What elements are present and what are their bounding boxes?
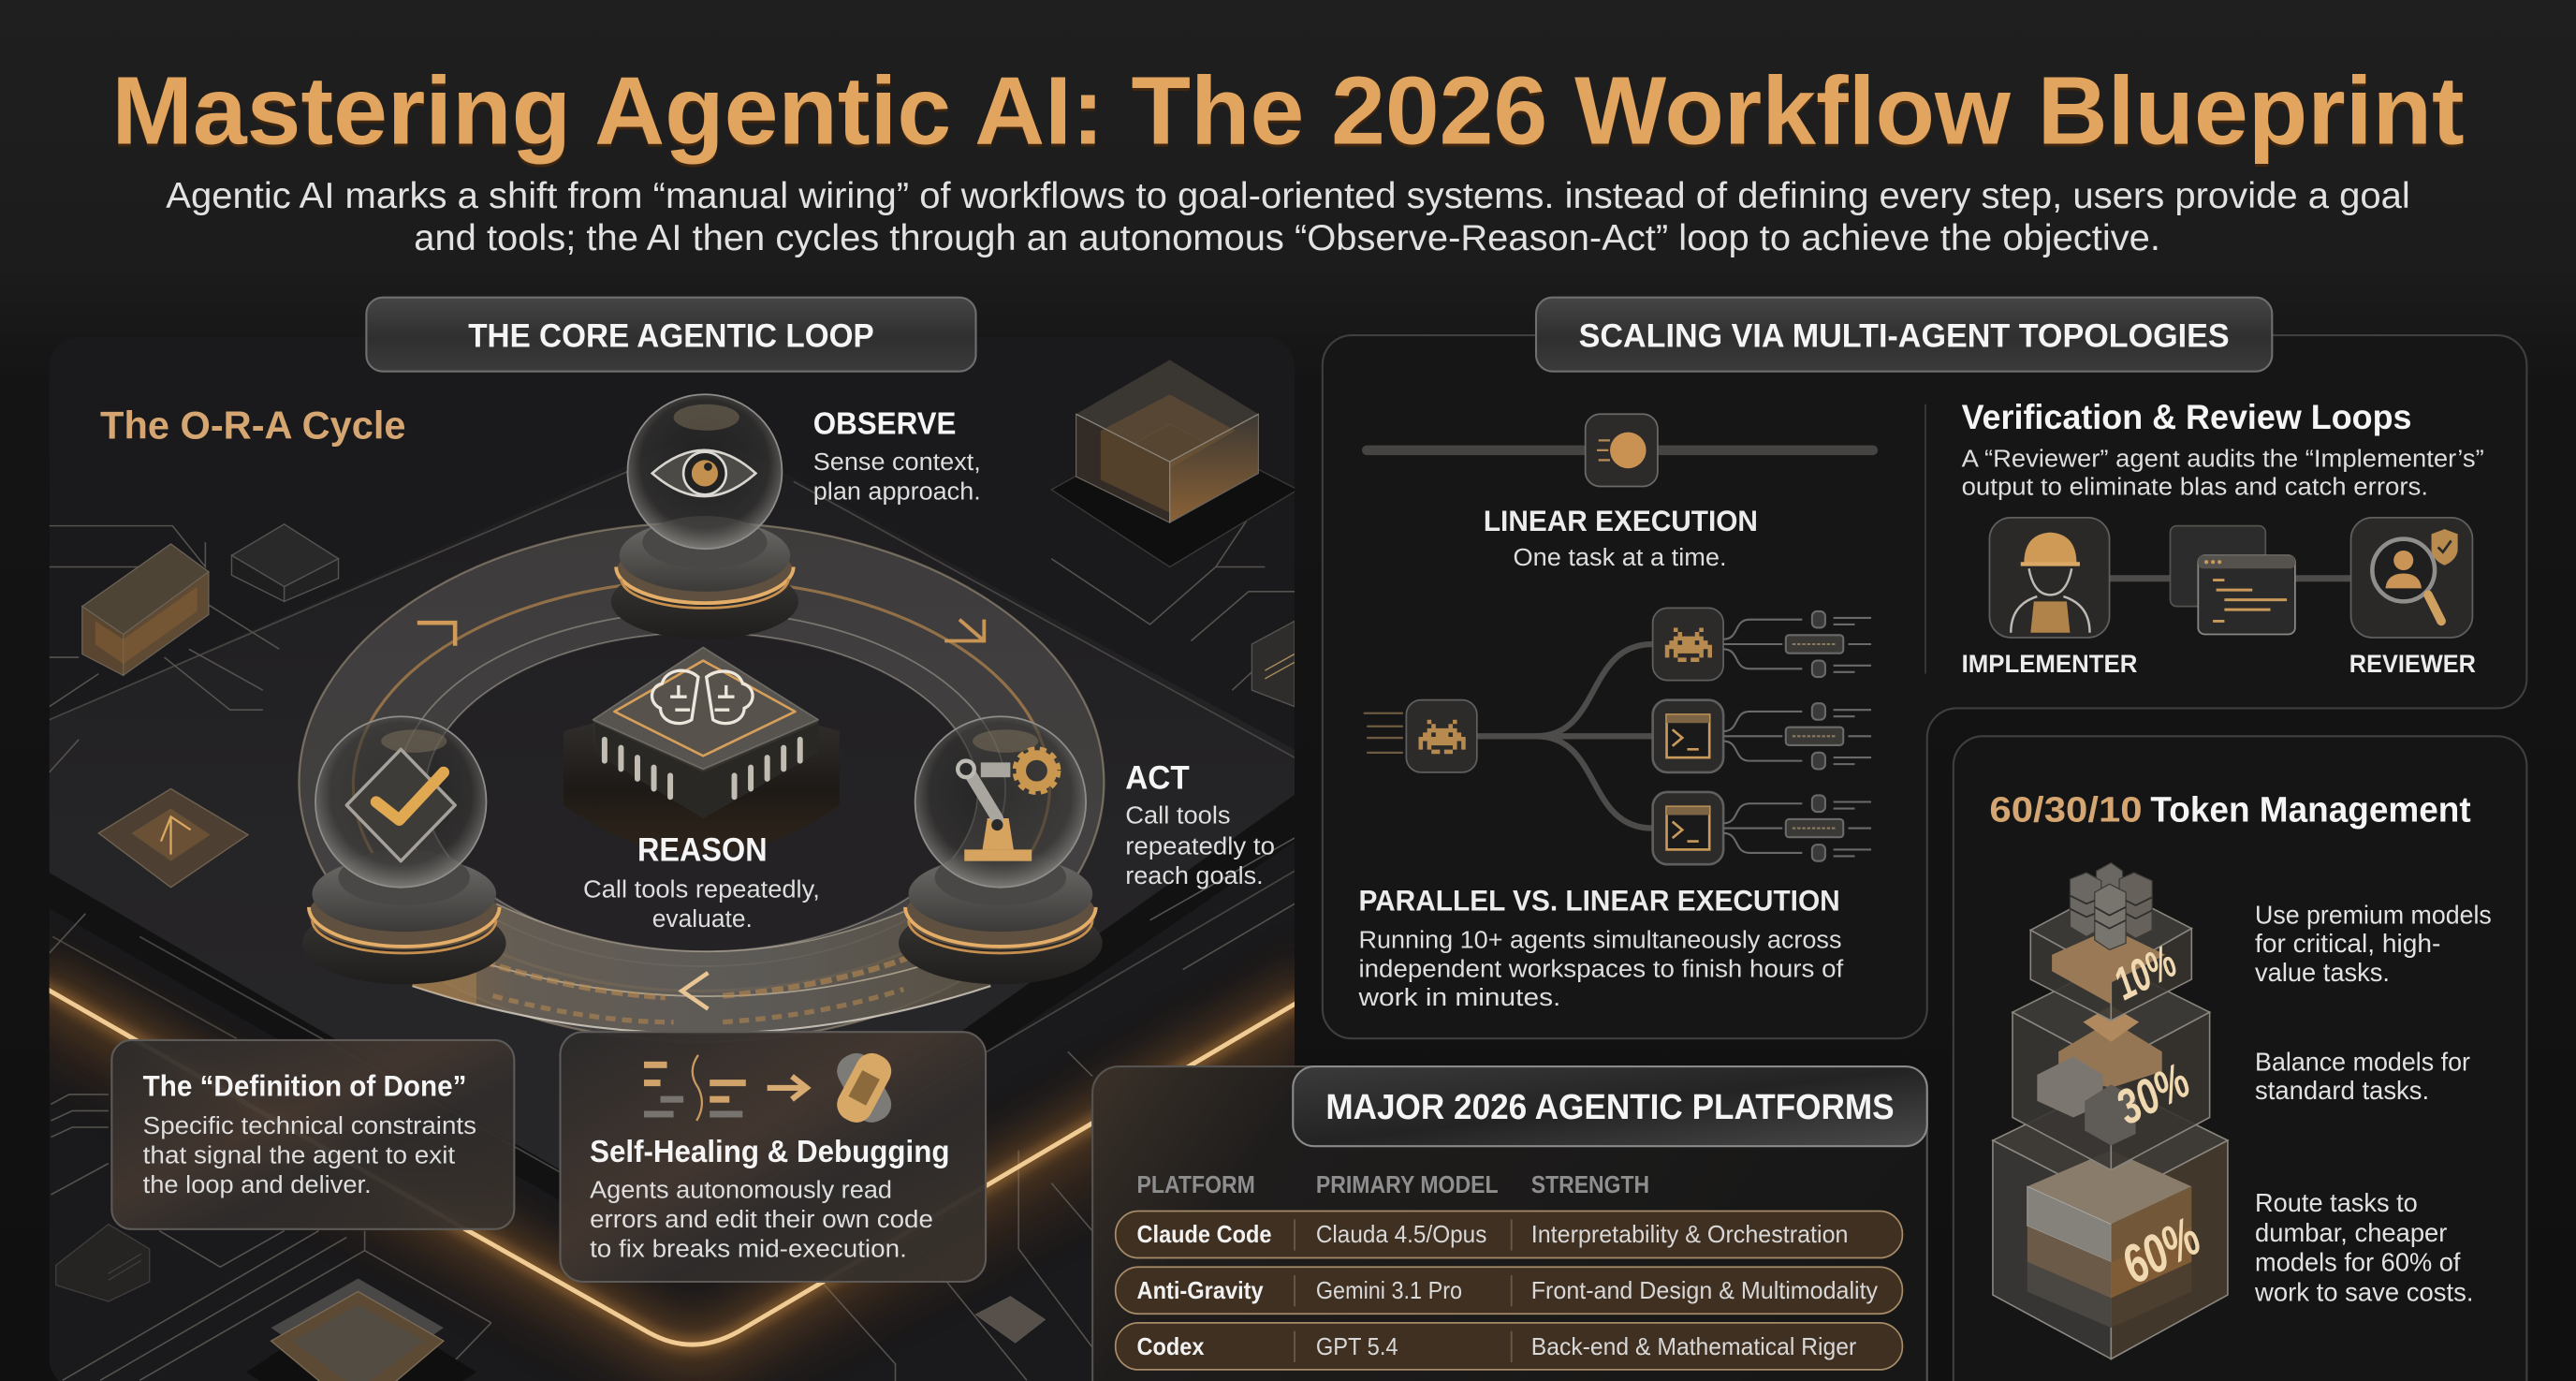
pyramid: 30 percent tier — [2012, 962, 2210, 1170]
card: definition of done: Specific technical constraints — [143, 1111, 476, 1139]
arrow: ring top left — [417, 623, 455, 646]
heading: scaling: SCALING VIA MULTI-AGENT TOPOLOGIES — [1579, 317, 2230, 354]
icon: robot arm — [958, 749, 1058, 861]
text: 10 percent tier: Use premium models — [2255, 900, 2492, 929]
text: 10 percent tier: for critical, high- — [2255, 929, 2440, 958]
icon: server stacks — [2070, 862, 2152, 949]
decorative cube: top right — [1051, 360, 1298, 567]
panel: core agentic loop — [0, 337, 1347, 1381]
text: 10 percent tier — [2255, 900, 2492, 987]
card: self-healing: Agents autonomously read — [590, 1175, 892, 1203]
icon: checkmark — [346, 749, 455, 861]
label: act: Call tools — [1125, 801, 1231, 829]
icon: implementer — [1989, 518, 2110, 638]
card: definition of done: The “Definition of Done” — [143, 1069, 466, 1103]
label: linear execution: One task at a time. — [1513, 543, 1727, 571]
glow wash under chevron — [33, 945, 1314, 1381]
row: anti-gravity — [1116, 1267, 1902, 1314]
chip pins — [605, 740, 800, 797]
title: Mastering Agentic AI: The 2026 Workflow Blueprint — [111, 56, 2465, 164]
card: self-healing: errors and edit their own code — [590, 1205, 933, 1233]
heading: agentic platforms — [1293, 1066, 1927, 1146]
row: claude code — [1116, 1212, 1902, 1258]
heading: scaling — [1536, 298, 2272, 372]
table header: PRIMARY MODEL — [1316, 1172, 1499, 1198]
heading: core agentic loop — [366, 298, 976, 372]
label: 30 percent: 30% — [2108, 1053, 2199, 1136]
terminal tile two — [1653, 792, 1723, 864]
row: codex: GPT 5.4 — [1316, 1334, 1398, 1360]
row: anti-gravity: Gemini 3.1 Pro — [1316, 1278, 1462, 1304]
row: claude code: Clauda 4.5/Opus — [1316, 1222, 1486, 1248]
diagram: implementer to reviewer — [1989, 518, 2472, 638]
card: definition of done: that signal the agent to exit — [143, 1141, 456, 1169]
table header: STRENGTH — [1531, 1172, 1649, 1198]
text: 30 percent tier: standard tasks. — [2255, 1076, 2429, 1105]
label: act: reach goals. — [1125, 861, 1264, 889]
label: reason: REASON — [637, 832, 768, 869]
text: 60 percent tier — [2254, 1188, 2473, 1306]
text: parallel vs linear: Running 10+ agents simultaneously across — [1358, 926, 1841, 954]
card: self-healing: Self-Healing & Debugging — [590, 1135, 949, 1169]
label: linear execution: LINEAR EXECUTION — [1484, 504, 1758, 537]
heading: core agentic loop: THE CORE AGENTIC LOOP — [468, 317, 874, 354]
terminal tile one — [1653, 700, 1723, 772]
table header: PLATFORM — [1137, 1172, 1255, 1198]
card: definition of done: the loop and deliver. — [143, 1170, 372, 1198]
label: reviewer: REVIEWER — [2349, 649, 2476, 678]
panel: multi-agent topologies — [1323, 335, 2526, 1038]
row: anti-gravity: Front-and Design & Multimodality — [1531, 1278, 1878, 1304]
row: anti-gravity: Anti-Gravity — [1137, 1278, 1264, 1304]
decorative cube: bottom amber — [246, 1278, 476, 1381]
node: act — [899, 716, 1103, 984]
label: observe: plan approach. — [813, 477, 981, 506]
worker agent tile — [1653, 608, 1723, 681]
label: act — [1125, 759, 1275, 889]
panel: agentic platforms table — [1092, 1066, 1927, 1381]
pyramid: 10 percent tier — [2030, 888, 2191, 1021]
text: parallel vs linear: work in minutes. — [1357, 983, 1560, 1011]
text: verification and review: A “Reviewer” agent audits the “Implementer’s” — [1962, 444, 2484, 472]
label: observe: Sense context, — [813, 448, 981, 476]
glowing chevron edge — [33, 981, 1314, 1344]
decorative chip: bottom right — [976, 1297, 1045, 1343]
source agent tile — [1406, 700, 1477, 772]
arrow: ring bottom — [681, 973, 708, 1009]
card: self-healing — [560, 1032, 986, 1282]
text: parallel vs linear: PARALLEL VS. LINEAR EXECUTION — [1358, 883, 1840, 917]
text: verification and review: Verification & Review Loops — [1962, 398, 2411, 436]
text: verification and review: output to eliminate blas and catch errors. — [1962, 472, 2428, 500]
decorative box: bottom left — [56, 1225, 150, 1301]
label: linear execution — [1484, 504, 1758, 571]
label: observe — [813, 406, 981, 506]
node: check — [302, 716, 506, 984]
heading: token management: Token Management — [2150, 790, 2471, 830]
label: reason: evaluate. — [652, 904, 753, 933]
subtitle: Agentic AI marks a shift from “manual wiring” of workflows to goal-oriented systems. instead of defining every step, users provide a goal — [166, 176, 2410, 216]
text: parallel vs linear — [1357, 883, 1844, 1011]
text: verification and review — [1962, 398, 2484, 500]
icon: code windows — [2170, 526, 2295, 634]
row: codex — [1116, 1323, 1902, 1370]
label: implementer: IMPLEMENTER — [1962, 649, 2138, 678]
decorative chip: left diamond — [98, 788, 248, 888]
row: claude code: Claude Code — [1137, 1222, 1271, 1248]
table header — [1137, 1172, 1649, 1198]
icon: reviewer — [2351, 518, 2472, 638]
arrow: ring top right — [944, 620, 984, 640]
heading: token management: 60/30/10 — [1989, 790, 2143, 830]
decorative cube: left amber — [82, 544, 209, 675]
label: reason — [583, 832, 820, 933]
text: 30 percent tier: Balance models for — [2255, 1047, 2470, 1076]
label: 10 percent: 10% — [2106, 936, 2185, 1010]
text: 10 percent tier: value tasks. — [2255, 958, 2390, 987]
text: 60 percent tier: dumbar, cheaper — [2255, 1218, 2447, 1247]
label: reason: Call tools repeatedly, — [583, 874, 820, 903]
subtitle — [166, 176, 2410, 258]
label: act: repeatedly to — [1125, 832, 1275, 860]
isometric platform — [49, 471, 1295, 1172]
icon: broken code to bandage — [644, 1048, 897, 1128]
heading: O-R-A cycle: The O-R-A Cycle — [100, 404, 406, 448]
diagram: linear execution — [1362, 414, 1878, 487]
row: codex: Back-end & Mathematical Riger — [1531, 1334, 1857, 1360]
decorative box: right edge — [1251, 621, 1295, 707]
card: self-healing: to fix breaks mid-execution. — [590, 1235, 907, 1263]
title: Mastering Agentic AI: The 2026 Workflow Blueprint — [111, 60, 2465, 168]
circuit traces — [50, 493, 1295, 1381]
text: 30 percent tier — [2255, 1047, 2470, 1105]
row: claude code: Interpretability & Orchestration — [1531, 1222, 1848, 1248]
text: 60 percent tier: work to save costs. — [2254, 1277, 2473, 1306]
decorative cube: small dark — [231, 524, 339, 601]
card: definition of done — [111, 1040, 514, 1229]
row: codex: Codex — [1137, 1334, 1204, 1360]
text: 60 percent tier: Route tasks to — [2255, 1188, 2418, 1217]
icon: eye — [652, 450, 755, 496]
subtitle: and tools; the AI then cycles through an autonomous “Observe-Reason-Act” loop to achieve the objective. — [414, 218, 2160, 258]
ring bottom glass segment — [413, 904, 990, 1034]
label: act: ACT — [1125, 759, 1190, 796]
diagram: parallel execution — [1364, 608, 1871, 864]
text: 60 percent tier: models for 60% of — [2255, 1247, 2461, 1276]
ring track — [299, 522, 1104, 1042]
label: observe: OBSERVE — [813, 406, 956, 441]
text: parallel vs linear: independent workspaces to finish hours of — [1358, 954, 1844, 982]
heading: token management — [1989, 790, 2471, 830]
node: observe — [611, 394, 798, 639]
pyramid: 60 percent tier — [1993, 1083, 2228, 1359]
icon: brain — [652, 670, 753, 724]
central chip — [564, 648, 840, 855]
panel: token management — [1954, 736, 2526, 1381]
label: 60 percent: 60% — [2113, 1207, 2210, 1296]
heading: agentic platforms: MAJOR 2026 AGENTIC PLATFORMS — [1325, 1087, 1895, 1126]
